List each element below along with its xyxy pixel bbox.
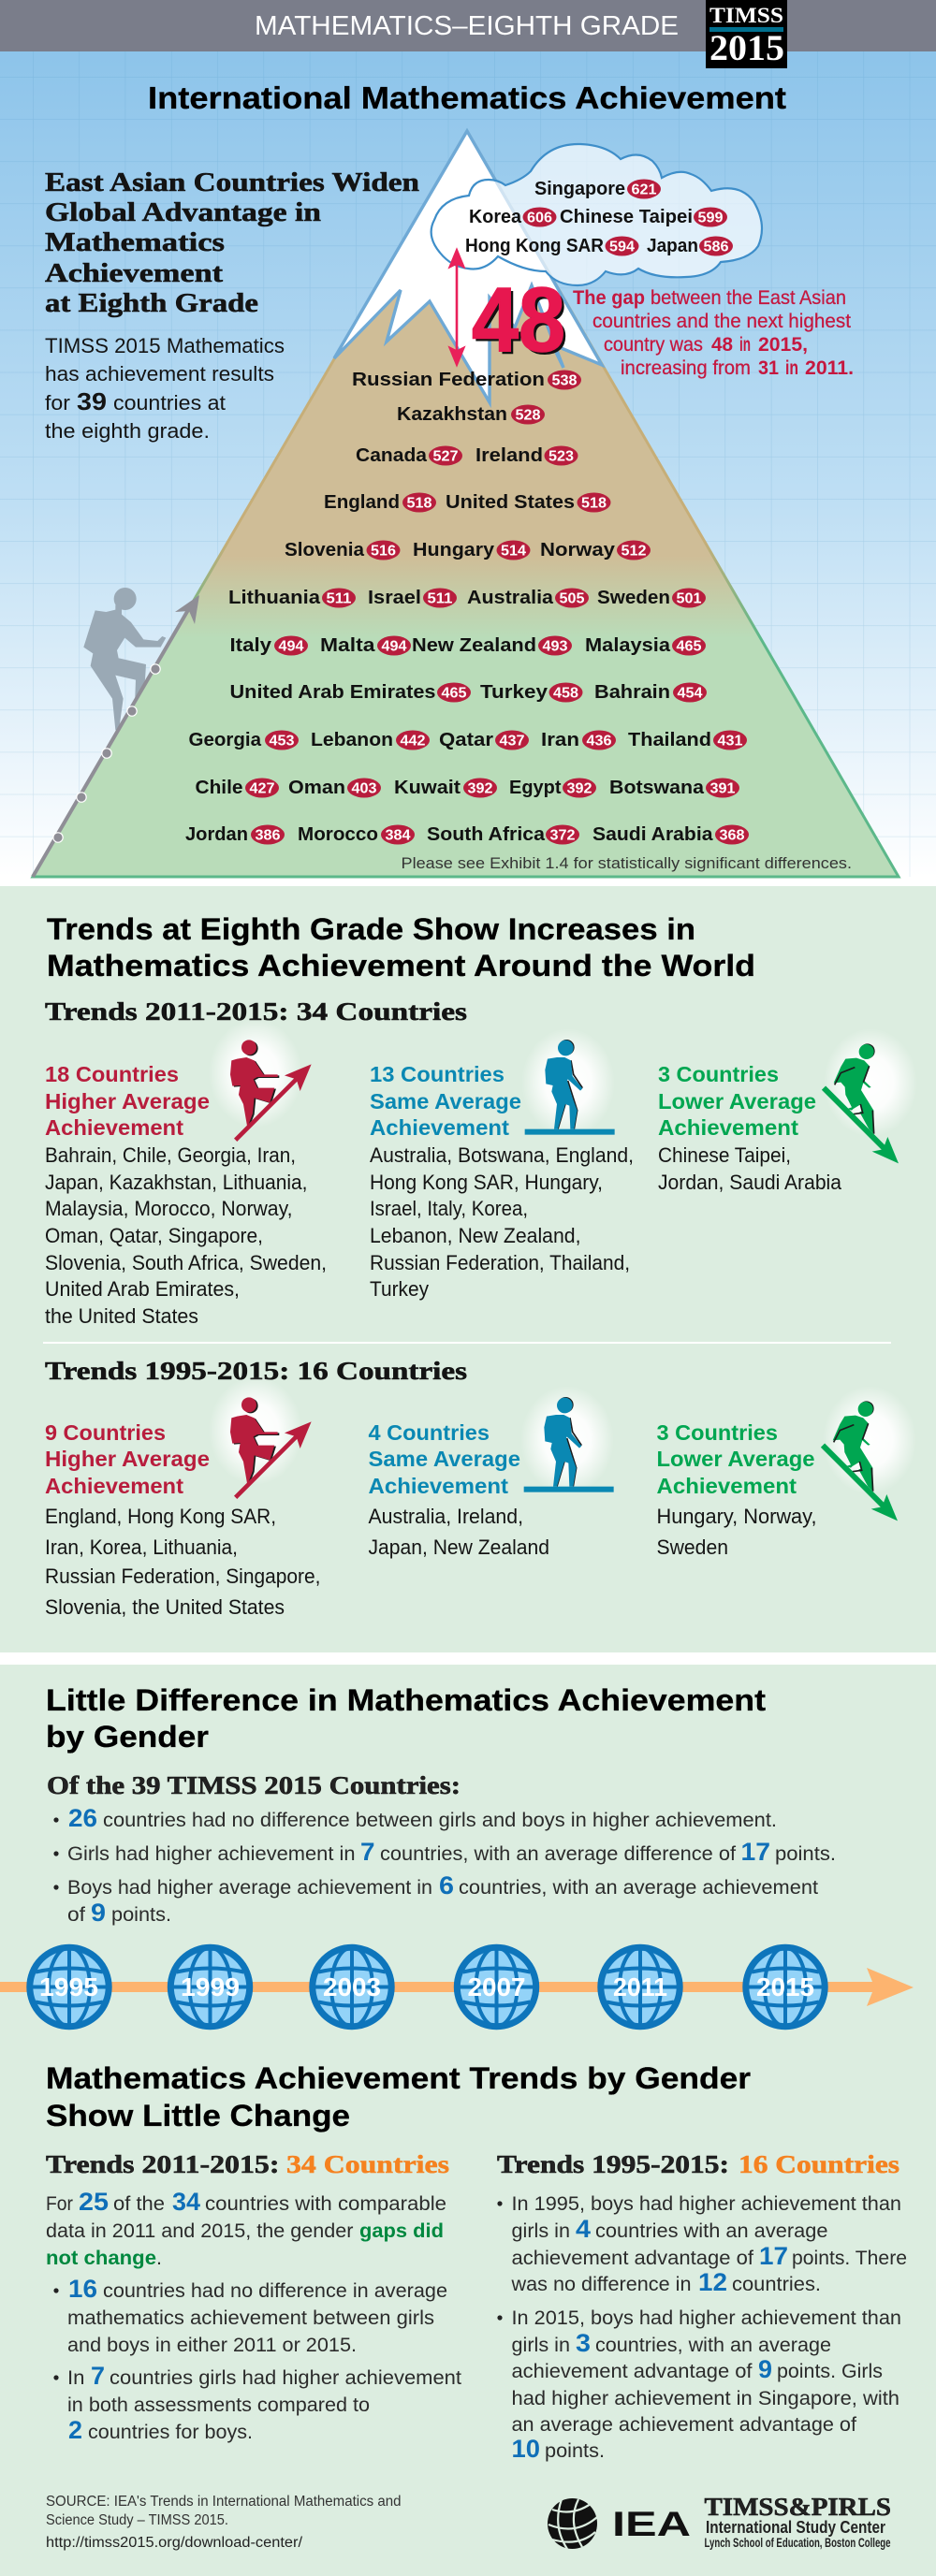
panel: gender background	[0, 1665, 936, 2576]
logo: IEA: IEA	[612, 2505, 691, 2543]
score row: Kazakhstan: 528	[515, 408, 541, 423]
text block: right column: achievement advantage of	[511, 2247, 753, 2269]
score row: Chile, Oman, Kuwait, Egypt, Botswana: 391	[709, 780, 736, 797]
column: 4 countries same: Achievement	[369, 1474, 508, 1498]
text block: right column: countries.	[732, 2273, 821, 2295]
score row: Jordan, Morocco, South Africa, Saudi Arabia: Saudi Arabia	[592, 823, 713, 845]
score row: Hong Kong SAR, Japan	[465, 235, 733, 256]
globe 2007: 2007	[468, 1972, 526, 2001]
bullet list: gender: of	[67, 1903, 85, 1926]
column: 13 countries same: Russian Federation, Thailand,	[370, 1251, 630, 1274]
text block: right column: 4	[576, 2215, 591, 2243]
score row: United Arab Emirates, Turkey, Bahrain: Turkey	[480, 681, 548, 703]
bullet list: gender: Girls had higher achievement in	[67, 1842, 356, 1865]
text block: left column: mathematics achievement between girls	[67, 2307, 434, 2329]
column: 9 countries higher	[45, 1420, 320, 1619]
score row: Chile, Oman, Kuwait, Egypt, Botswana: 392	[468, 780, 492, 797]
bullet list: gender: 6	[439, 1871, 454, 1899]
gap note: The gap	[573, 286, 645, 309]
score row: Italy, Malta, New Zealand, Malaysia: 493	[543, 638, 568, 655]
column: 13 countries same: Israel, Italy, Korea,	[370, 1197, 528, 1220]
text block: left column: countries girls had higher achievement	[110, 2366, 461, 2389]
column: 18 countries higher: 18 Countries	[45, 1062, 179, 1086]
heading: gender trends: Show Little Change	[46, 2099, 350, 2132]
title: International Mathematics Achievement	[148, 80, 786, 115]
score row: Jordan, Morocco, South Africa, Saudi Arabia: South Africa	[427, 823, 546, 845]
score row: Georgia, Lebanon, Qatar, Iran, Thailand	[189, 729, 747, 750]
score row: Korea, Chinese Taipei: Korea	[469, 206, 522, 227]
text block: left column: .	[156, 2247, 162, 2269]
score row: Lithuania, Israel, Australia, Sweden: 505	[560, 591, 585, 606]
column: 13 countries same	[370, 1062, 634, 1301]
score row: England, United States: United States	[446, 491, 575, 513]
gap note: countries and the next highest	[592, 310, 851, 332]
score row: Chile, Oman, Kuwait, Egypt, Botswana: 427	[249, 780, 275, 797]
heading: East Asian Countries Widen: at Eighth Grade	[45, 289, 258, 318]
score row: Korea, Chinese Taipei: Chinese Taipei	[560, 206, 693, 227]
score row: Georgia, Lebanon, Qatar, Iran, Thailand: Lebanon	[311, 729, 393, 750]
text block: left column: 2	[68, 2416, 82, 2444]
subheading: trends 1995-2015: Trends 1995-2015: 16 Countries	[45, 1357, 467, 1385]
subheading: right column: 16 Countries	[739, 2150, 899, 2178]
globe 2015: 2015	[756, 1972, 814, 2001]
score row: Korea, Chinese Taipei: 606	[527, 210, 552, 226]
score row: Lithuania, Israel, Australia, Sweden	[228, 587, 706, 608]
column: 3 countries lower: Lower Average	[658, 1089, 816, 1113]
logo: TIMSS & PIRLS: TIMSS&PIRLS	[704, 2493, 891, 2521]
column: 3 countries lower: Lower Average	[657, 1447, 814, 1471]
heading: East Asian Countries Widen: Achievement	[45, 259, 224, 288]
gap note: 31	[758, 357, 779, 379]
intro text: for	[45, 391, 70, 415]
text block: left column: In	[67, 2366, 84, 2389]
bullet list: gender: 17	[741, 1838, 770, 1866]
score row: Canada, Ireland: 527	[432, 449, 459, 464]
heading: gender	[46, 1683, 766, 1754]
text block: left column	[46, 2188, 461, 2444]
intro text: 39	[77, 387, 107, 415]
column: 18 countries higher: the United States	[45, 1304, 198, 1328]
text block: right column	[497, 2192, 907, 2463]
bullet list: gender: 26	[68, 1804, 97, 1832]
intro text: countries at	[113, 391, 226, 415]
column: 13 countries same: Australia, Botswana, England,	[370, 1143, 634, 1167]
score row: England, United States	[324, 491, 610, 513]
score row: Jordan, Morocco, South Africa, Saudi Arabia: Jordan	[185, 823, 248, 845]
heading: gender trends: Mathematics Achievement Trends by Gender	[46, 2061, 751, 2095]
score row: Italy, Malta, New Zealand, Malaysia: Malaysia	[585, 634, 671, 656]
heading: East Asian Countries Widen: East Asian Countries Widen	[45, 168, 419, 197]
text block: right column: had higher achievement in Singapore, with	[511, 2387, 899, 2409]
header band: MATHEMATICS–EIGHTH GRADE	[255, 11, 679, 41]
score row: Lithuania, Israel, Australia, Sweden: 501	[676, 591, 702, 606]
score row: Lithuania, Israel, Australia, Sweden: Lithuania	[228, 587, 321, 608]
globe 1999: 1999	[181, 1972, 240, 2001]
score row: Jordan, Morocco, South Africa, Saudi Arabia: 368	[719, 827, 745, 844]
source note: Science Study – TIMSS 2015.	[46, 2512, 228, 2528]
text block: right column: girls in	[511, 2219, 570, 2242]
subheading: right column	[497, 2150, 899, 2178]
score row: Jordan, Morocco, South Africa, Saudi Arabia: Morocco	[298, 823, 378, 845]
globe 2011: 2011	[613, 1972, 667, 2001]
text block: right column: girls in	[511, 2334, 570, 2356]
gap note: country was	[604, 333, 703, 356]
score row: Georgia, Lebanon, Qatar, Iran, Thailand: 453	[270, 734, 295, 749]
globe 2003: 2003	[323, 1972, 381, 2001]
text block: left column: 7	[91, 2362, 105, 2390]
subheading: left column: Trends 2011-2015:	[46, 2150, 279, 2178]
text block: left column: data in 2011 and 2015, the gender	[46, 2219, 354, 2242]
subheading: of the 39 countries: Of the 39 TIMSS 2015 Countries:	[47, 1771, 461, 1799]
score row: Canada, Ireland	[356, 444, 578, 466]
column: 3 countries lower: 3 Countries	[657, 1420, 778, 1445]
bullet list: gender: 7	[360, 1838, 374, 1866]
text block: right column: 3	[576, 2329, 591, 2357]
score row: Georgia, Lebanon, Qatar, Iran, Thailand: 437	[500, 734, 524, 749]
logo: IEA globe	[548, 2498, 597, 2549]
score row: United Arab Emirates, Turkey, Bahrain: Bahrain	[594, 681, 670, 703]
score row: Russian Federation: Russian Federation	[352, 369, 545, 390]
column: 13 countries same: Lebanon, New Zealand,	[370, 1224, 580, 1247]
score row: Slovenia, Hungary, Norway	[285, 539, 651, 560]
score row: Lithuania, Israel, Australia, Sweden: Australia	[467, 587, 554, 608]
bullet list: gender: countries, with an average difference of	[380, 1842, 736, 1865]
text block: right column: In 2015, boys had higher achievement than	[511, 2307, 901, 2329]
text block: left column: countries had no difference in average	[103, 2279, 447, 2302]
globe 2003	[312, 1947, 392, 2027]
score row: Slovenia, Hungary, Norway: 514	[501, 543, 526, 560]
text block: left column: of the	[113, 2192, 165, 2215]
score row: Georgia, Lebanon, Qatar, Iran, Thailand: Thailand	[628, 729, 711, 750]
bullet list: gender: countries, with an average achievement	[459, 1876, 818, 1899]
header band	[0, 0, 936, 51]
score row: Italy, Malta, New Zealand, Malaysia: 494	[279, 638, 304, 655]
score row: Lithuania, Israel, Australia, Sweden: Israel	[368, 587, 421, 608]
score row: Georgia, Lebanon, Qatar, Iran, Thailand: 442	[401, 734, 425, 749]
score row: Georgia, Lebanon, Qatar, Iran, Thailand: Georgia	[189, 729, 262, 750]
text block: right column: 10	[511, 2435, 540, 2463]
gap note: between the East Asian	[651, 286, 846, 309]
column: 18 countries higher: Achievement	[45, 1115, 183, 1140]
score row: Chile, Oman, Kuwait, Egypt, Botswana: Egypt	[509, 777, 562, 798]
column: 4 countries same	[369, 1420, 549, 1559]
source note	[46, 2494, 401, 2551]
column: 13 countries same: Achievement	[370, 1115, 509, 1140]
score row: Canada, Ireland: Ireland	[475, 444, 543, 466]
column: 9 countries higher: 9 Countries	[45, 1420, 166, 1445]
column: 18 countries higher: Higher Average	[45, 1089, 210, 1113]
column: 3 countries lower: Achievement	[657, 1474, 797, 1498]
heading: trends: Mathematics Achievement Around the World	[47, 949, 755, 982]
column: 18 countries higher	[45, 1062, 327, 1328]
intro text: TIMSS 2015 Mathematics	[45, 334, 285, 357]
column: 9 countries higher: England, Hong Kong SAR,	[45, 1505, 276, 1528]
score row: Slovenia, Hungary, Norway: Norway	[540, 539, 616, 560]
climber silhouette	[83, 588, 166, 733]
TIMSS 2015 logo	[706, 0, 787, 68]
heading: trends	[47, 912, 755, 982]
heading: East Asian Countries Widen: Global Advantage in	[45, 198, 322, 227]
gap note: 2011.	[805, 357, 854, 379]
bullet list: gender: points.	[111, 1903, 171, 1926]
score row: Georgia, Lebanon, Qatar, Iran, Thailand: 431	[717, 734, 743, 749]
icon: walker down	[824, 1028, 917, 1163]
intro text: the eighth grade.	[45, 419, 210, 443]
column: 18 countries higher: Malaysia, Morocco, Norway,	[45, 1197, 292, 1220]
column: 13 countries same: 13 Countries	[370, 1062, 505, 1086]
footnote: Please see Exhibit 1.4 for statistically significant differences.	[401, 854, 852, 872]
text block: right column: 12	[698, 2268, 727, 2296]
text block: right column: points. Girls	[777, 2360, 883, 2382]
source note: http://timss2015.org/download-center/	[46, 2535, 303, 2551]
text block: left column: not change	[46, 2247, 156, 2269]
cloud	[431, 144, 762, 285]
score row: Canada, Ireland: 523	[548, 449, 574, 464]
gap note	[573, 286, 854, 379]
score row: England, United States: England	[324, 491, 400, 513]
globe 2007	[457, 1947, 537, 2027]
icon: walker level	[521, 1028, 615, 1137]
score row: England, United States: 518	[406, 496, 432, 511]
column: 9 countries higher: Russian Federation, Singapore,	[45, 1565, 320, 1588]
column: 9 countries higher: Iran, Korea, Lithuania,	[45, 1535, 238, 1559]
column: 3 countries lower: Achievement	[658, 1115, 798, 1140]
subheading: right column: Trends 1995-2015:	[497, 2150, 729, 2178]
column: 13 countries same: Same Average	[370, 1089, 521, 1113]
score row: Slovenia, Hungary, Norway: Hungary	[413, 539, 495, 560]
column: 18 countries higher: Japan, Kazakhstan, Lithuania,	[45, 1171, 307, 1194]
bullet list: gender: Boys had higher average achievement in	[67, 1876, 432, 1899]
snow cap	[334, 131, 602, 402]
gap number 48: 48	[475, 271, 568, 373]
globe 1995: 1995	[39, 1972, 98, 2001]
text block: left column: countries for boys.	[88, 2421, 253, 2443]
score row: Georgia, Lebanon, Qatar, Iran, Thailand: 436	[586, 734, 612, 749]
score row: Chile, Oman, Kuwait, Egypt, Botswana: Chile	[195, 777, 243, 798]
bullet list: gender: 9	[91, 1899, 106, 1927]
gap arrow	[448, 248, 465, 367]
logo: TIMSS & PIRLS	[704, 2493, 891, 2550]
globe 1999	[170, 1947, 251, 2027]
heading: gender: Little Difference in Mathematics Achievement	[46, 1683, 766, 1717]
score row: Hong Kong SAR, Japan: 594	[609, 240, 635, 255]
gap note: 2015,	[758, 333, 808, 356]
intro text	[45, 334, 285, 443]
gap note: 48	[711, 333, 733, 356]
text block: right column: an average achievement advantage of	[511, 2413, 856, 2436]
heading: East Asian Countries Widen: Mathematics	[45, 228, 225, 257]
intro text: has achievement results	[45, 362, 274, 386]
score row: Korea, Chinese Taipei: 599	[698, 210, 724, 226]
score row: Italy, Malta, New Zealand, Malaysia: New Zealand	[412, 634, 536, 656]
slope arrow with nodes	[33, 595, 199, 877]
column: 18 countries higher: Bahrain, Chile, Georgia, Iran,	[45, 1143, 296, 1167]
text block: right column: 17	[759, 2242, 788, 2270]
icon: climber up	[209, 1019, 312, 1140]
globe 2011	[600, 1947, 680, 2027]
column: 18 countries higher: Oman, Qatar, Singapore,	[45, 1224, 263, 1247]
source note: SOURCE: IEA's Trends in International Mathematics and	[46, 2494, 401, 2510]
text block: left column: 34	[172, 2188, 200, 2216]
column: 13 countries same: Hong Kong SAR, Hungary,	[370, 1171, 603, 1194]
score row: United Arab Emirates, Turkey, Bahrain: 458	[553, 685, 578, 702]
text block: left column: and boys in either 2011 or 2015.	[67, 2334, 357, 2356]
score row: Chile, Oman, Kuwait, Egypt, Botswana	[195, 777, 739, 798]
score row: Jordan, Morocco, South Africa, Saudi Arabia: 386	[255, 827, 281, 844]
column: 3 countries lower: 3 Countries	[658, 1062, 779, 1086]
text block: right column: was no difference in	[510, 2273, 691, 2295]
score row: Singapore: Singapore	[534, 178, 625, 199]
score row: Hong Kong SAR, Japan: 586	[704, 240, 729, 255]
globe 2015	[745, 1947, 826, 2027]
score row: Hong Kong SAR, Japan: Japan	[647, 235, 698, 256]
score row: Hong Kong SAR, Japan: Hong Kong SAR	[465, 235, 604, 256]
text block: left column: 16	[68, 2275, 97, 2303]
subheading: trends 2011-2015: Trends 2011-2015: 34 Countries	[45, 997, 467, 1026]
bullet list: gender: points.	[775, 1842, 836, 1865]
score row: Slovenia, Hungary, Norway: 516	[371, 543, 396, 560]
sky background panel	[0, 51, 936, 877]
column: 4 countries same: Australia, Ireland,	[369, 1505, 523, 1528]
score row: United Arab Emirates, Turkey, Bahrain: 465	[442, 685, 467, 702]
column: 3 countries lower: Hungary, Norway,	[657, 1505, 816, 1528]
score row: Kazakhstan: Kazakhstan	[397, 403, 507, 425]
score row: Russian Federation: 538	[552, 372, 578, 389]
text block: right column: achievement advantage of	[511, 2360, 753, 2382]
text block: right column: points. There	[792, 2247, 907, 2269]
text block: right column: points.	[545, 2439, 605, 2462]
TIMSS 2015 logo: TIMSS	[709, 4, 783, 27]
score row: Slovenia, Hungary, Norway: 512	[622, 543, 646, 560]
gap note: in	[739, 333, 751, 356]
score row: Italy, Malta, New Zealand, Malaysia: Malta	[320, 634, 375, 656]
logo: TIMSS & PIRLS: International Study Center	[706, 2518, 885, 2537]
TIMSS 2015 logo: 2015	[709, 28, 784, 68]
score row: Italy, Malta, New Zealand, Malaysia: 465	[676, 638, 702, 655]
column: 3 countries lower: Jordan, Saudi Arabia	[658, 1171, 842, 1194]
score row: Chile, Oman, Kuwait, Egypt, Botswana: 392	[567, 780, 592, 797]
column: 4 countries same: Same Average	[369, 1447, 520, 1471]
text block: right column: countries with an average	[595, 2219, 827, 2242]
score row: Chile, Oman, Kuwait, Egypt, Botswana: Oman	[288, 777, 345, 798]
score row: Chile, Oman, Kuwait, Egypt, Botswana: 403	[352, 780, 377, 797]
bullet list: gender	[53, 1804, 836, 1927]
score row: Jordan, Morocco, South Africa, Saudi Arabia: 384	[386, 827, 411, 844]
heading: gender trends	[46, 2061, 751, 2132]
text block: right column: 9	[758, 2355, 772, 2383]
column: 3 countries lower: Chinese Taipei,	[658, 1143, 791, 1167]
column: 18 countries higher: Slovenia, South Africa, Sweden,	[45, 1251, 327, 1274]
column: 3 countries lower	[658, 1062, 842, 1194]
score row: Italy, Malta, New Zealand, Malaysia: Italy	[230, 634, 272, 656]
score row: Lithuania, Israel, Australia, Sweden: 511	[326, 591, 352, 606]
text block: right column: In 1995, boys had higher achievement than	[511, 2192, 901, 2215]
bullet list: gender: countries had no difference between girls and boys in higher achievement.	[103, 1809, 777, 1831]
score row: Jordan, Morocco, South Africa, Saudi Arabia	[185, 823, 749, 845]
heading: trends: Trends at Eighth Grade Show Increases in	[47, 912, 695, 946]
column: 9 countries higher: Achievement	[45, 1474, 183, 1498]
heading: East Asian Countries Widen	[45, 168, 419, 318]
score row: Chile, Oman, Kuwait, Egypt, Botswana: Kuwait	[394, 777, 461, 798]
column: 13 countries same: Turkey	[370, 1277, 429, 1301]
icon: walker down	[823, 1386, 916, 1521]
score row: Singapore: 621	[631, 182, 657, 198]
column: 18 countries higher: United Arab Emirates,	[45, 1277, 240, 1301]
score row: United Arab Emirates, Turkey, Bahrain: United Arab Emirates	[230, 681, 436, 703]
icon: walker level	[520, 1386, 614, 1494]
score row: Lithuania, Israel, Australia, Sweden: 511	[427, 591, 453, 606]
globe 1995	[29, 1947, 110, 2027]
score row: Canada, Ireland: Canada	[356, 444, 428, 466]
score row: Jordan, Morocco, South Africa, Saudi Arabia: 372	[550, 827, 575, 844]
timeline arrow	[0, 1968, 914, 2006]
text block: left column: gaps did	[359, 2219, 444, 2242]
column: 9 countries higher: Slovenia, the United States	[45, 1595, 285, 1619]
gap note: increasing from	[621, 357, 751, 379]
column: 9 countries higher: Higher Average	[45, 1447, 210, 1471]
score row: Italy, Malta, New Zealand, Malaysia: 494	[382, 638, 407, 655]
column: 3 countries lower: Sweden	[657, 1535, 728, 1559]
icon: climber up	[209, 1376, 312, 1497]
heading: gender: by Gender	[46, 1720, 209, 1754]
text block: left column: in both assessments compared to	[67, 2394, 370, 2416]
score row: Lithuania, Israel, Australia, Sweden: Sweden	[597, 587, 670, 608]
score row: Chile, Oman, Kuwait, Egypt, Botswana: Botswana	[609, 777, 705, 798]
score row: United Arab Emirates, Turkey, Bahrain: 454	[678, 685, 703, 702]
text block: left column: countries with comparable	[205, 2192, 446, 2215]
panel: trends background	[0, 886, 936, 1652]
score row: England, United States: 518	[581, 496, 607, 511]
column: 4 countries same: Japan, New Zealand	[369, 1535, 549, 1559]
subheading: left column: 34 Countries	[286, 2150, 449, 2178]
text block: left column: For	[46, 2192, 73, 2215]
subheading: left column	[46, 2150, 449, 2178]
score row: Georgia, Lebanon, Qatar, Iran, Thailand: Qatar	[439, 729, 493, 750]
gap number 48: 48	[472, 269, 565, 371]
score row: Georgia, Lebanon, Qatar, Iran, Thailand: Iran	[541, 729, 579, 750]
mountain	[33, 131, 899, 877]
text block: left column: 25	[79, 2188, 109, 2216]
column: 4 countries same: 4 Countries	[369, 1420, 490, 1445]
gap note: in	[785, 357, 798, 379]
score row: Italy, Malta, New Zealand, Malaysia	[230, 634, 706, 656]
score row: United Arab Emirates, Turkey, Bahrain	[230, 681, 707, 703]
text block: right column: countries, with an average	[595, 2334, 831, 2356]
score row: Korea, Chinese Taipei	[469, 206, 727, 227]
column: 3 countries lower	[657, 1420, 816, 1559]
score row: Slovenia, Hungary, Norway: Slovenia	[285, 539, 365, 560]
